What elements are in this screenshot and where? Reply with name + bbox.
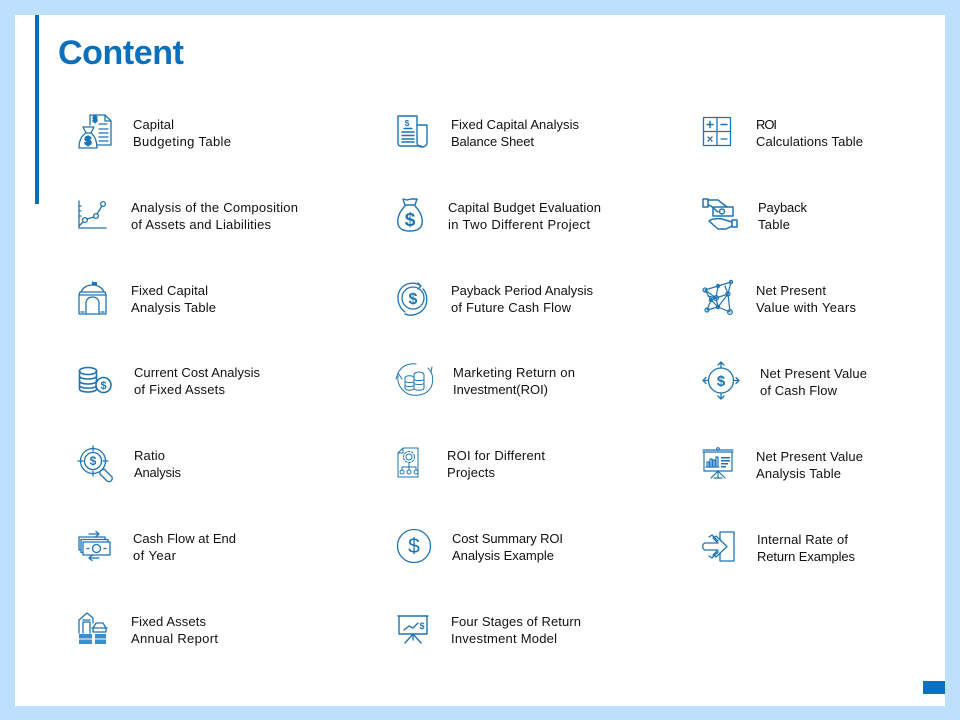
icon: coin stack (80, 368, 111, 392)
icon: presentation board (398, 616, 428, 643)
label: of Year (133, 548, 177, 563)
icon: house, car and bricks (79, 613, 107, 644)
icon: money bag and document (79, 115, 111, 148)
icon: money bag (398, 199, 422, 231)
item: Internal Rate of Return Examples (703, 532, 856, 564)
icon: circular dollar (398, 283, 427, 315)
label: in Two Different Project (448, 217, 590, 232)
item: Capital Budget Evaluation (398, 199, 601, 232)
label: Analysis Table (131, 300, 216, 315)
icon: money bag: $ (405, 210, 416, 231)
label: ROI for Different (447, 448, 545, 463)
corner marker (923, 681, 945, 694)
icon: domed building (79, 282, 106, 314)
icon: line chart (79, 201, 106, 228)
icon: circular dollar: $ (409, 291, 418, 308)
icon: coin stack: $ (100, 380, 107, 392)
icon: dollar with four arrows (703, 362, 739, 399)
icon: dollar circle: $ (408, 535, 420, 558)
label: Ratio (134, 448, 165, 463)
label: ROI (756, 117, 777, 132)
item: Cost Summary ROI (398, 530, 563, 563)
item: ROI Calculations Table (704, 117, 863, 149)
icon: gear document (398, 448, 418, 477)
icon: paper scroll (398, 116, 427, 147)
icon: entry arrow (703, 532, 734, 561)
item: Analysis of the Composition (79, 200, 298, 232)
item: Net Present Value Analysis Table (703, 448, 863, 481)
label: Net Present Value (756, 449, 863, 464)
item: Net Present Value with Years (703, 280, 856, 315)
icon: dollar with four arrows: $ (717, 373, 726, 390)
icon: network (703, 280, 733, 314)
item: Payback Table (703, 199, 808, 232)
icon: hands exchanging money (703, 199, 737, 229)
item: Cash Flow at End of Year (79, 531, 236, 563)
item: Payback Period Analysis (398, 283, 594, 315)
label: Cost Summary ROI (452, 531, 563, 546)
label: Fixed Assets (131, 614, 206, 629)
label: Fixed Capital Analysis (451, 117, 580, 132)
label: Table (758, 217, 790, 232)
icon: dollar circle (398, 530, 430, 562)
accent bar (35, 15, 39, 204)
label: Capital Budget Evaluation (448, 200, 601, 215)
label: Capital (133, 117, 174, 132)
icon: target and magnifier: $ (90, 454, 97, 468)
label: Cash Flow at End (133, 531, 236, 546)
label: Net Present Value (760, 366, 867, 381)
label: Payback (758, 200, 808, 215)
label: of Future Cash Flow (451, 300, 572, 315)
label: Return Examples (757, 549, 856, 564)
icon: chart on easel (703, 448, 733, 478)
label: Fixed Capital (131, 283, 208, 298)
item: Fixed Assets Annual Report (79, 613, 218, 646)
label: Net Present (756, 283, 826, 298)
label: Investment Model (451, 631, 557, 646)
label: of Assets and Liabilities (131, 217, 272, 232)
title: Content (58, 34, 184, 72)
label: Internal Rate of (757, 532, 848, 547)
icon: presentation board: $ (419, 621, 425, 631)
icon: money bag and document: $ (85, 134, 92, 148)
item: Ratio Analysis (78, 446, 182, 482)
item: Fixed Capital Analysis Table (79, 282, 216, 315)
label: Marketing Return on (453, 365, 575, 380)
item: Current Cost Analysis (80, 365, 260, 397)
item: Fixed Capital Analysis Balance Sheet (398, 116, 580, 149)
icon: money bag and document: $ (93, 115, 98, 124)
label: Annual Report (131, 631, 218, 646)
label: Analysis of the Composition (131, 200, 298, 215)
label: Payback Period Analysis (451, 283, 594, 298)
label: of Fixed Assets (134, 382, 226, 397)
label: Four Stages of Return (451, 614, 581, 629)
label: Analysis Table (756, 466, 841, 481)
label: Calculations Table (756, 134, 863, 149)
label: Investment(ROI) (453, 382, 548, 397)
label: of Cash Flow (760, 383, 838, 398)
icon: banknotes with arrows (79, 532, 110, 560)
label: Value with Years (756, 300, 856, 315)
item: Marketing Return on Investment (396, 364, 575, 397)
label: Analysis (134, 465, 182, 480)
label: Analysis Example (452, 548, 554, 563)
item: Four Stages of Return (398, 614, 581, 646)
item: Net Present Value of Cash Flow (703, 362, 867, 399)
icon: paper scroll: $ (405, 119, 410, 128)
label: Current Cost Analysis (134, 365, 260, 380)
item: ROI for Different Projects (398, 448, 545, 480)
label: Balance Sheet (451, 134, 534, 149)
item: Capital Budgeting Table (79, 115, 231, 149)
label: Projects (447, 465, 496, 480)
label: Budgeting Table (133, 134, 231, 149)
icon: calculator grid (704, 118, 730, 146)
icon: coins in circular arrows (396, 364, 433, 395)
